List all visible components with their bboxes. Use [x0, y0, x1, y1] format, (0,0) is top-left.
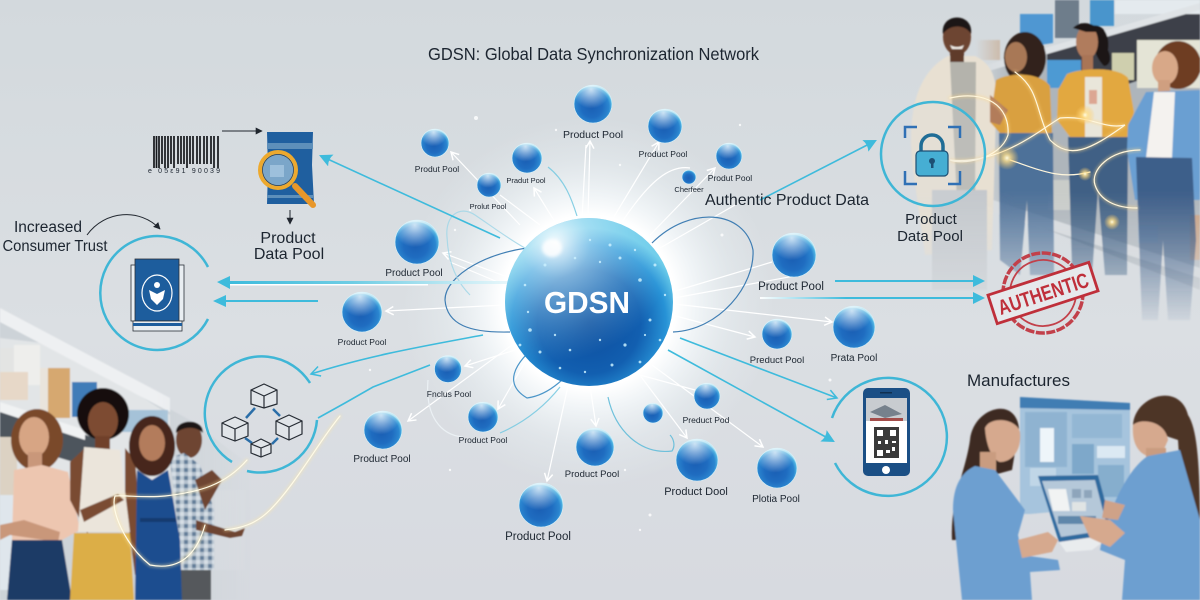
arrows: to authentic stamp [760, 275, 985, 304]
label: product data pool left: Product [260, 230, 316, 247]
cyan flow arrows [311, 141, 875, 441]
product pool labels: Product Pool [565, 469, 619, 480]
product pool labels: Preduct Pool [750, 355, 804, 366]
photo: shoppers at shelves, bottom left [0, 308, 250, 600]
cube left [222, 417, 248, 441]
product pool labels: Fnclus Pool [427, 389, 471, 399]
photo: shoppers at shelves, top right [911, 0, 1200, 320]
person: woman in blue dress [129, 416, 182, 600]
icon: cube network circle [205, 356, 317, 473]
arrows: to consumer trust circle [213, 276, 538, 307]
product pool labels: Product Pool [639, 149, 687, 159]
icon: phone with QR code circle [832, 378, 947, 496]
product pool labels: Produt Pool [415, 164, 459, 174]
cube bottom [251, 439, 271, 457]
white arrows from core to product pools [386, 141, 832, 481]
product pool labels: Plotia Pool [752, 494, 800, 505]
product pool labels: Produt Pool [708, 173, 752, 183]
store shelves backdrop [967, 0, 1200, 290]
label: product data pool right [897, 211, 963, 245]
icon: authentic stamp: AUTHENTIC [995, 269, 1092, 320]
heading: authentic product data: Authentic Product Data [705, 192, 869, 209]
arrow: to product data pool, upper left [321, 156, 500, 238]
product pool labels: Product Dool [664, 486, 728, 498]
product pool labels: Product Pool [338, 337, 386, 347]
product pool labels: Cherfeer [674, 185, 704, 194]
icon: lock circle [881, 102, 985, 206]
arrow: to QR phone, open head [680, 338, 837, 398]
arrow: to QR phone, filled head [668, 350, 833, 441]
icon: consumer trust circle with book [100, 236, 208, 350]
cube top [251, 384, 277, 408]
person: woman in mustard cardigan [1057, 23, 1134, 275]
product pool labels: Product Pool [385, 268, 443, 279]
person: woman with ponytail [1080, 396, 1200, 600]
icon: barcode [148, 136, 220, 175]
person: man in cream jacket [911, 18, 996, 290]
sparkle particles [369, 116, 832, 531]
label: increased consumer trust [2, 219, 108, 255]
label: product data pool right: Product [905, 211, 958, 228]
GDSN core sphere [505, 218, 673, 386]
holographic data screen [1020, 397, 1130, 514]
label: increased consumer trust: Consumer Trust [2, 238, 108, 255]
product pool nodes [342, 85, 875, 527]
arrow: to blockchain circle [311, 335, 483, 374]
arrow: to authentic lock circle [760, 141, 875, 200]
label: increased consumer trust: Increased [14, 219, 82, 236]
person: woman in white top and yellow trousers [70, 388, 145, 600]
arrow: trust curve [87, 215, 160, 235]
label: product data pool left: Data Pool [254, 246, 324, 263]
product pool labels: Product Pool [505, 531, 571, 543]
icon: authentic stamp [980, 239, 1106, 347]
arrow: barcode to bag [222, 130, 262, 132]
product pool labels: Pradut Pool [506, 176, 546, 185]
central light burst [404, 117, 774, 487]
icon: barcode: e 05ε91 90039 [148, 168, 220, 175]
orbit curves around core [428, 167, 753, 451]
product pool labels: Product Pool [353, 454, 411, 465]
label: product data pool right: Data Pool [897, 228, 963, 245]
link to blockchain circle lower [318, 365, 430, 418]
store shelves backdrop [0, 308, 250, 600]
product pool labels: Product Pool [459, 435, 507, 445]
light strands: top-right glow [950, 72, 1140, 230]
product pool labels: Prolut Pool [470, 202, 507, 211]
person: woman in peach blouse [0, 409, 80, 600]
photo: manufacturers with tablet, bottom right [952, 396, 1200, 600]
tablet [1038, 475, 1114, 552]
title: GDSN: Global Data Synchronization Network [428, 44, 759, 64]
label: manufactures: Manufactures [967, 372, 1070, 390]
arrow: bag to data pool [289, 210, 291, 224]
label: product data pool left [254, 230, 324, 263]
product pool labels [338, 129, 877, 543]
product pool labels: Product Pool [563, 129, 623, 141]
cube right [276, 415, 302, 440]
icon: product bag with magnifier [260, 132, 314, 205]
person: woman with long brown hair [952, 409, 1060, 600]
light strands: bottom-left glow [114, 416, 340, 566]
person: woman in blue blazer [1127, 41, 1200, 320]
core label: GDSN [544, 285, 630, 320]
person: man in plaid shirt [170, 422, 245, 600]
product pool labels: Product Pool [758, 281, 824, 293]
product pool labels: Preduct Pod [683, 415, 730, 425]
product pool labels: Prata Pool [831, 353, 877, 364]
person: woman in yellow top [990, 32, 1054, 275]
